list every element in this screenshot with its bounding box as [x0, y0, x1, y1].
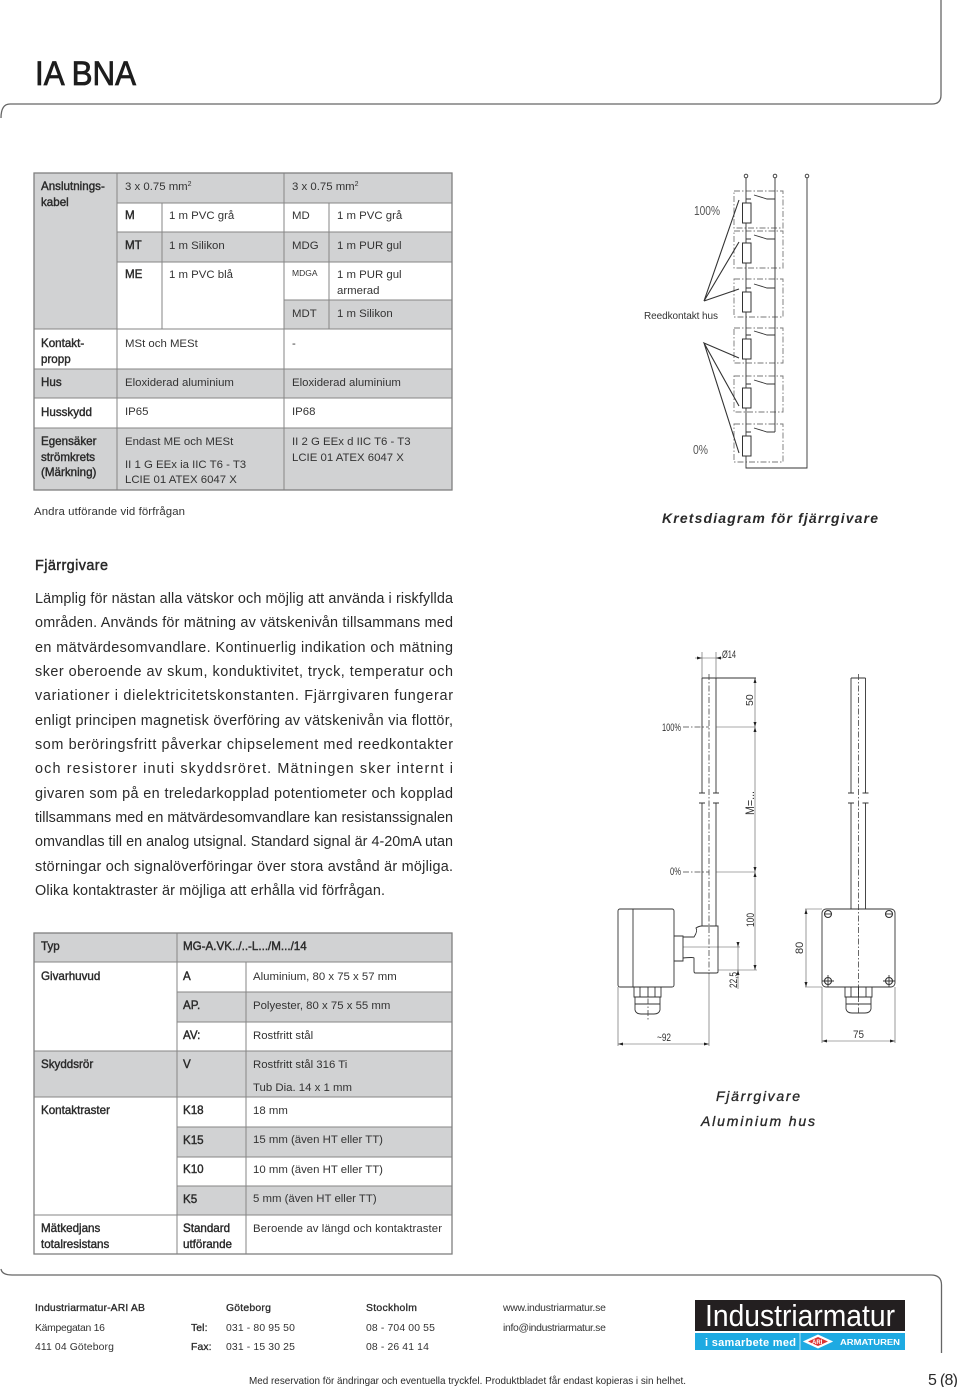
- housing: [822, 909, 895, 987]
- row: Anslutningskabel: 3 x 0.75 mm: [125, 181, 188, 193]
- table: type specifications: [34, 933, 452, 1254]
- description text: områden. Används för mätning av vätskenivån tillsammans med: [35, 615, 453, 631]
- label: M=...: M=...: [743, 791, 757, 815]
- footer: web contact: www.industriarmatur.se: [502, 1303, 606, 1314]
- row: Kontaktpropp: [41, 337, 296, 366]
- cable gland: [845, 987, 872, 1013]
- row: Givarhuvud: A: [183, 970, 191, 983]
- label: 75: 75: [853, 1029, 864, 1041]
- housing divider: [632, 909, 634, 987]
- footer: company address: 411 04 Göteborg: [35, 1342, 114, 1353]
- row: Skyddsrör: Skyddsrör: [41, 1058, 93, 1071]
- section heading: Fjärrgivare: [35, 558, 108, 574]
- row: Anslutningskabel: kabel: [41, 196, 69, 209]
- row: Kontaktraster: K18: [183, 1104, 204, 1117]
- probe tube: [699, 674, 756, 974]
- row: Givarhuvud: Polyester, 80 x 75 x 55 mm: [253, 1000, 390, 1012]
- row: Givarhuvud: Aluminium, 80 x 75 x 57 mm: [253, 971, 397, 983]
- row: Kontaktpropp: propp: [41, 353, 71, 366]
- footer: phone labels: Tel:: [191, 1323, 208, 1334]
- label: 100: 100: [745, 913, 757, 927]
- label: Ø14: Ø14: [722, 649, 736, 661]
- description text: [35, 591, 453, 899]
- label: 0%: 0%: [693, 442, 708, 457]
- description text: omvandlas till en analog utsignal. Standard signal är 4-20mA utan: [35, 834, 453, 850]
- row: Anslutningskabel: armerad: [337, 285, 379, 297]
- row: Skyddsrör: Tub Dia. 14 x 1 mm: [253, 1082, 352, 1094]
- footer: company address: Kämpegatan 16: [35, 1323, 105, 1334]
- row: Anslutningskabel: 1 m PVC blå: [169, 269, 234, 281]
- description text: Lämplig för nästan alla vätskor och möjlig att använda i riskfyllda: [35, 591, 453, 607]
- label: 0%: 0%: [670, 866, 681, 878]
- footer: phone labels: Fax:: [191, 1342, 212, 1353]
- header frame: [1, 0, 941, 118]
- cable gland: [634, 987, 661, 1020]
- row: Kontaktraster: 10 mm (även HT eller TT): [253, 1164, 383, 1176]
- row: Anslutningskabel: 1 m PVC grå: [337, 210, 403, 222]
- row: Anslutningskabel: 1 m Silikon: [337, 308, 393, 320]
- row: Hus: Eloxiderad aluminium: [292, 377, 401, 389]
- row: Typ: MG-A.VK../..-L.../M.../14: [183, 940, 307, 953]
- row: Husskydd: [41, 406, 315, 419]
- description text: givaren som på en treledarkopplad potentiometer och kopplad: [35, 786, 453, 802]
- row: Egensäker strömkrets: II 2 G EEx d IIC T6 - T3: [292, 436, 411, 448]
- row: Typ: Typ: [41, 940, 60, 953]
- caption: product name: [700, 1088, 815, 1129]
- row: Anslutningskabel: 3 x 0.75 mm: [292, 181, 355, 193]
- row: Husskydd: Husskydd: [41, 406, 92, 419]
- row: Givarhuvud: [41, 970, 397, 1042]
- footer: Stockholm: 08 - 704 00 55: [366, 1323, 435, 1334]
- footer: Göteborg: [226, 1303, 295, 1353]
- leader lines: [704, 200, 739, 453]
- row: Husskydd: IP68: [292, 406, 315, 418]
- note: other versions on request: Andra utförande vid förfrågan: [34, 506, 185, 518]
- row: Kontaktpropp: Kontakt-: [41, 337, 84, 350]
- row: Anslutningskabel: Anslutnings-: [41, 180, 105, 193]
- row: Anslutningskabel: [41, 180, 403, 320]
- row: Givarhuvud: AP.: [183, 999, 200, 1012]
- row: Kontaktpropp: -: [292, 338, 296, 350]
- row: Anslutningskabel: 1 m PUR gul: [337, 240, 402, 252]
- connector fitting: [674, 926, 718, 973]
- footer: phone labels: [191, 1323, 212, 1353]
- row: Hus: Eloxiderad aluminium: [125, 377, 234, 389]
- row: Egensäker strömkrets: Egensäker: [41, 435, 97, 448]
- row: Egensäker strömkrets: LCIE 01 ATEX 6047 X: [292, 452, 404, 464]
- technical drawing: side view: [618, 649, 757, 1046]
- row: Mätkedjans totalresistans: utförande: [183, 1238, 232, 1251]
- row: Givarhuvud: Rostfritt stål: [253, 1030, 313, 1042]
- row: Egensäker strömkrets: II 1 G EEx ia IIC T6 - T3: [125, 459, 246, 471]
- row: Givarhuvud: Givarhuvud: [41, 970, 100, 983]
- row: Mätkedjans totalresistans: Mätkedjans: [41, 1222, 100, 1235]
- row: Anslutningskabel: MDG: [292, 240, 319, 252]
- row: Skyddsrör: V: [183, 1058, 191, 1071]
- label: ~92: ~92: [657, 1032, 671, 1044]
- footer: Göteborg: Göteborg: [226, 1303, 271, 1314]
- row: Anslutningskabel: MDT: [292, 308, 317, 320]
- footer: Stockholm: 08 - 26 41 14: [366, 1342, 429, 1353]
- footer: company address: Industriarmatur-ARI AB: [35, 1303, 145, 1314]
- footer: Stockholm: Stockholm: [366, 1303, 417, 1314]
- row: Kontaktraster: [41, 1104, 383, 1206]
- row: Givarhuvud: AV:: [183, 1029, 200, 1042]
- footer: Stockholm: [366, 1303, 435, 1353]
- row: Kontaktraster: 15 mm (även HT eller TT): [253, 1134, 383, 1146]
- row: Hus: [41, 376, 401, 389]
- caption: product name: Fjärrgivare: [716, 1088, 800, 1104]
- logo: [695, 1298, 905, 1350]
- row: Skyddsrör: [41, 1058, 352, 1094]
- description text: tillsammans med en mätvärdesomvandlare kan resistanssignalen: [35, 810, 453, 826]
- reed switches: [746, 195, 775, 432]
- row: Anslutningskabel: 2: [188, 181, 192, 188]
- label: 100%: 100%: [662, 722, 681, 734]
- mounting screws: [822, 910, 895, 987]
- footer: Göteborg: 031 - 15 30 25: [226, 1342, 295, 1353]
- dimensions: [804, 909, 895, 1043]
- label: 50: 50: [744, 694, 756, 706]
- label: 100%: 100%: [694, 203, 720, 218]
- row: Anslutningskabel: M: [125, 209, 135, 222]
- logo: ARMATUREN: [840, 1338, 900, 1347]
- row: Anslutningskabel: ME: [125, 268, 143, 281]
- housing: [618, 909, 674, 987]
- logo: ARI emblem: [804, 1335, 832, 1348]
- row: Egensäker strömkrets: (Märkning): [41, 466, 97, 479]
- logo: i samarbete med: [705, 1337, 796, 1349]
- label: 22,5: 22,5: [728, 972, 740, 988]
- description text: störningar och signalöverföringar över stora avstånd är möjliga.: [35, 859, 453, 875]
- row: Kontaktraster: K15: [183, 1134, 204, 1147]
- row: Skyddsrör: Rostfritt stål 316 Ti: [253, 1059, 347, 1071]
- reed contact housings: [734, 191, 783, 462]
- row: Anslutningskabel: 2: [355, 181, 359, 188]
- row: Mätkedjans totalresistans: totalresistans: [41, 1238, 110, 1251]
- wiring and terminals: [744, 174, 809, 468]
- description text: variationer i dielektricitetskonstanten. Fjärrgivaren fungerar: [35, 688, 453, 704]
- row: Anslutningskabel: 1 m PUR gul: [337, 269, 402, 281]
- row: Kontaktraster: K10: [183, 1163, 204, 1176]
- label: Reedkontakt hus: Reedkontakt hus: [644, 311, 718, 322]
- row: Anslutningskabel: MD: [292, 210, 310, 222]
- row: Egensäker strömkrets: LCIE 01 ATEX 6047 X: [125, 474, 237, 486]
- logo: Industriarmatur: [705, 1298, 895, 1333]
- row: Anslutningskabel: 1 m Silikon: [169, 240, 225, 252]
- logo: ARI emblem: ARI: [812, 1340, 823, 1346]
- description text: sker oberoende av skum, konduktivitet, tryck, temperatur och: [35, 664, 453, 680]
- description text: Olika kontaktraster är möjliga att erhålla vid förfrågan.: [35, 883, 385, 899]
- row: Kontaktraster: Kontaktraster: [41, 1104, 110, 1117]
- row: Mätkedjans totalresistans: Standard: [183, 1222, 230, 1235]
- footer frame: [1, 1269, 942, 1353]
- probe tube: [848, 674, 868, 1013]
- row: Egensäker strömkrets: Endast ME och MESt: [125, 436, 234, 448]
- row: Kontaktraster: K5: [183, 1193, 197, 1206]
- label: 80: 80: [794, 942, 806, 954]
- row: Mätkedjans totalresistans: Beroende av längd och kontaktraster: [253, 1223, 442, 1235]
- description text: som beröringsfritt påverkar chipselement med reedkontakter: [35, 737, 453, 753]
- row: Kontaktraster: 5 mm (även HT eller TT): [253, 1193, 377, 1205]
- caption: product name: Aluminium hus: [700, 1113, 815, 1129]
- row: Egensäker strömkrets: [41, 435, 411, 486]
- footer: web contact: info@industriarmatur.se: [503, 1323, 606, 1334]
- row: Husskydd: IP65: [125, 406, 148, 418]
- footer: company address: [35, 1303, 145, 1353]
- circuit diagram: [644, 174, 809, 468]
- row: Kontaktraster: 18 mm: [253, 1105, 288, 1117]
- row: Hus: Hus: [41, 376, 62, 389]
- resistors: [742, 203, 751, 456]
- technical drawing: front view: [794, 674, 895, 1043]
- row: Anslutningskabel: 1 m PVC grå: [169, 210, 235, 222]
- row: Anslutningskabel: MDGA: [292, 268, 318, 278]
- row: Anslutningskabel: MT: [125, 239, 142, 252]
- table: cable and housing specifications: [34, 173, 452, 490]
- caption: circuit diagram: Kretsdiagram för fjärrgivare: [662, 510, 878, 526]
- footer: web contact: [502, 1303, 606, 1334]
- description text: en mätvärdesomvandlare. Kontinuerlig indikation och mätning: [35, 640, 453, 656]
- footer: Göteborg: 031 - 80 95 50: [226, 1323, 295, 1334]
- dimensions: [618, 652, 740, 1046]
- row: Typ: [41, 940, 307, 953]
- row: Egensäker strömkrets: strömkrets: [41, 451, 95, 464]
- row: Mätkedjans totalresistans: [41, 1222, 442, 1251]
- description text: och resistorer inuti skyddsröret. Mätningen sker internt i: [35, 761, 453, 777]
- disclaimer: Med reservation för ändringar och eventuella tryckfel. Produktbladet får endast kopieras i sin helhet.: [249, 1375, 686, 1387]
- level marks: [683, 678, 757, 970]
- title: IA BNA: [35, 55, 136, 93]
- description text: enligt principen magnetisk överföring av vätskenivån via flottör,: [35, 713, 453, 729]
- row: Kontaktpropp: MSt och MESt: [125, 338, 199, 350]
